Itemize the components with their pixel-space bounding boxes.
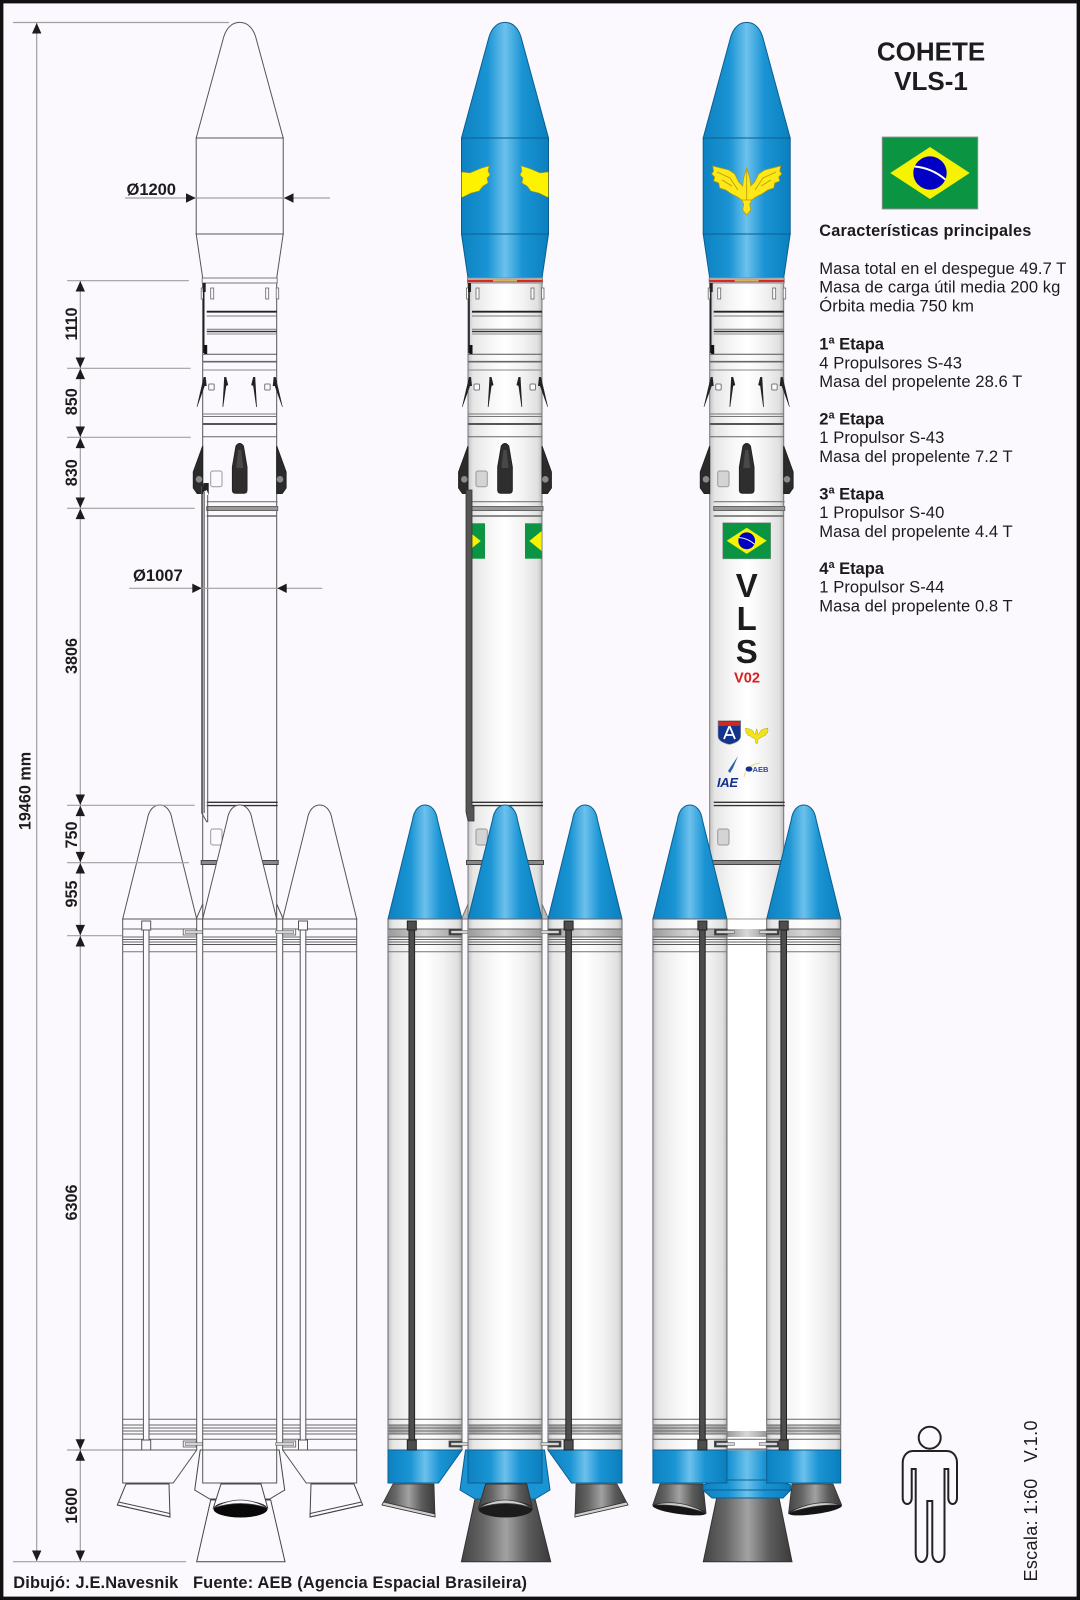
scale and version note: Escala: 1:60 V.1.0 <box>1021 1420 1041 1582</box>
C: IAE logo: IAE <box>717 775 738 790</box>
credits <box>13 1574 527 1592</box>
B: boosters <box>388 805 622 1483</box>
flag of Brazil <box>882 137 978 209</box>
title: COHETE <box>877 36 985 66</box>
B: long feed tube <box>466 490 474 821</box>
A: core <box>193 22 286 928</box>
rocket C: coloured front view <box>652 22 842 1562</box>
rocket A: line drawing <box>117 22 363 1562</box>
text block: general data: Órbita media 750 km <box>819 296 974 315</box>
text block: stage 3: Masa del propelente 4.4 T <box>819 522 1013 541</box>
A: side nozzles <box>117 1484 363 1517</box>
section labels: 955 <box>63 880 81 908</box>
C: AEB logo: AEB <box>752 765 769 774</box>
section labels <box>63 308 81 1524</box>
B: emblem wings on nose <box>462 166 548 197</box>
credits: Fuente: AEB (Agencia Espacial Brasileira) <box>193 1574 527 1592</box>
text block: stage 2: 2ª Etapa <box>819 409 885 428</box>
text block: general data: Masa de carga útil media 200 kg <box>819 278 1060 297</box>
section labels: 1600 <box>63 1488 81 1524</box>
text block: stage 4 <box>819 559 1013 615</box>
text block: stage 3: 1 Propulsor S-40 <box>819 503 944 522</box>
B: side nozzles <box>382 1484 628 1517</box>
section labels: 750 <box>63 821 81 849</box>
text block: stage 2 <box>819 409 1013 466</box>
text block: stage 1: 1ª Etapa <box>819 335 885 354</box>
C: boosters <box>653 805 841 1483</box>
section labels: 6306 <box>63 1184 81 1221</box>
text block: stage 1: Masa del propelente 28.6 T <box>819 372 1022 391</box>
A: boosters <box>123 805 357 1483</box>
C: small emblem <box>745 728 768 744</box>
C: IAE logo <box>717 756 738 790</box>
B: upper nozzle <box>478 1484 532 1518</box>
A: big nozzle <box>197 1500 285 1562</box>
C: VLS lettering: S <box>736 633 758 670</box>
rocket B: coloured side view <box>382 22 628 1562</box>
C: VLS lettering: L <box>737 600 757 637</box>
B: core <box>459 22 551 928</box>
C: rear booster section <box>727 919 767 1450</box>
C: side nozzles <box>652 1484 842 1518</box>
text block: stage 3 <box>819 484 1013 541</box>
credits: Dibujó: J.E.Navesnik <box>13 1574 179 1592</box>
text block: stage 1: 4 Propulsores S-43 <box>819 353 962 372</box>
B: body flags <box>472 523 542 559</box>
C: AEB logo <box>744 763 769 777</box>
overall height label: 19460 mm <box>17 752 35 830</box>
section labels: 1110 <box>63 308 81 340</box>
section labels: 850 <box>63 388 81 415</box>
text block: general data: Masa total en el despegue 49.7 T <box>819 259 1066 278</box>
text block: stage 4: 1 Propulsor S-44 <box>819 578 944 597</box>
text block: stage 4: 4ª Etapa <box>819 559 885 578</box>
A: nozzle with exit <box>213 1484 268 1518</box>
C: emblem on nose <box>712 166 782 215</box>
text block: stage 1 <box>819 335 1022 391</box>
C: shield logo <box>718 721 741 744</box>
B: central booster base <box>460 1450 550 1499</box>
B: big nozzle <box>461 1499 551 1562</box>
C: body flag <box>723 523 771 559</box>
section labels: 3806 <box>63 638 81 674</box>
C: core <box>700 22 793 920</box>
diameter dimension 1007 <box>129 566 322 593</box>
diameter dimension 1200: Ø1200 <box>126 180 176 199</box>
text block: stage 2: 1 Propulsor S-43 <box>819 428 944 447</box>
C: VLS lettering: V <box>736 567 758 604</box>
section labels: 830 <box>63 459 81 486</box>
text block: stage 2: Masa del propelente 7.2 T <box>819 447 1013 466</box>
diameter dimension 1200 <box>125 180 330 203</box>
human scale figure <box>903 1427 957 1562</box>
A: central booster base <box>195 1450 285 1499</box>
title: VLS-1 <box>894 66 968 96</box>
dimension lines: left column <box>13 22 229 1562</box>
C: big nozzle <box>703 1498 792 1562</box>
text block: general data <box>819 259 1066 315</box>
text block: stage 4: Masa del propelente 0.8 T <box>819 596 1013 615</box>
diameter dimension 1007: Ø1007 <box>133 566 183 585</box>
title <box>877 36 985 96</box>
text block: stage 3: 3ª Etapa <box>819 484 885 503</box>
heading: main characteristics: Características principales <box>819 222 1031 240</box>
C: fairing <box>703 1450 791 1498</box>
C: VLS lettering <box>736 567 758 670</box>
C: V02 mark: V02 <box>734 670 760 686</box>
